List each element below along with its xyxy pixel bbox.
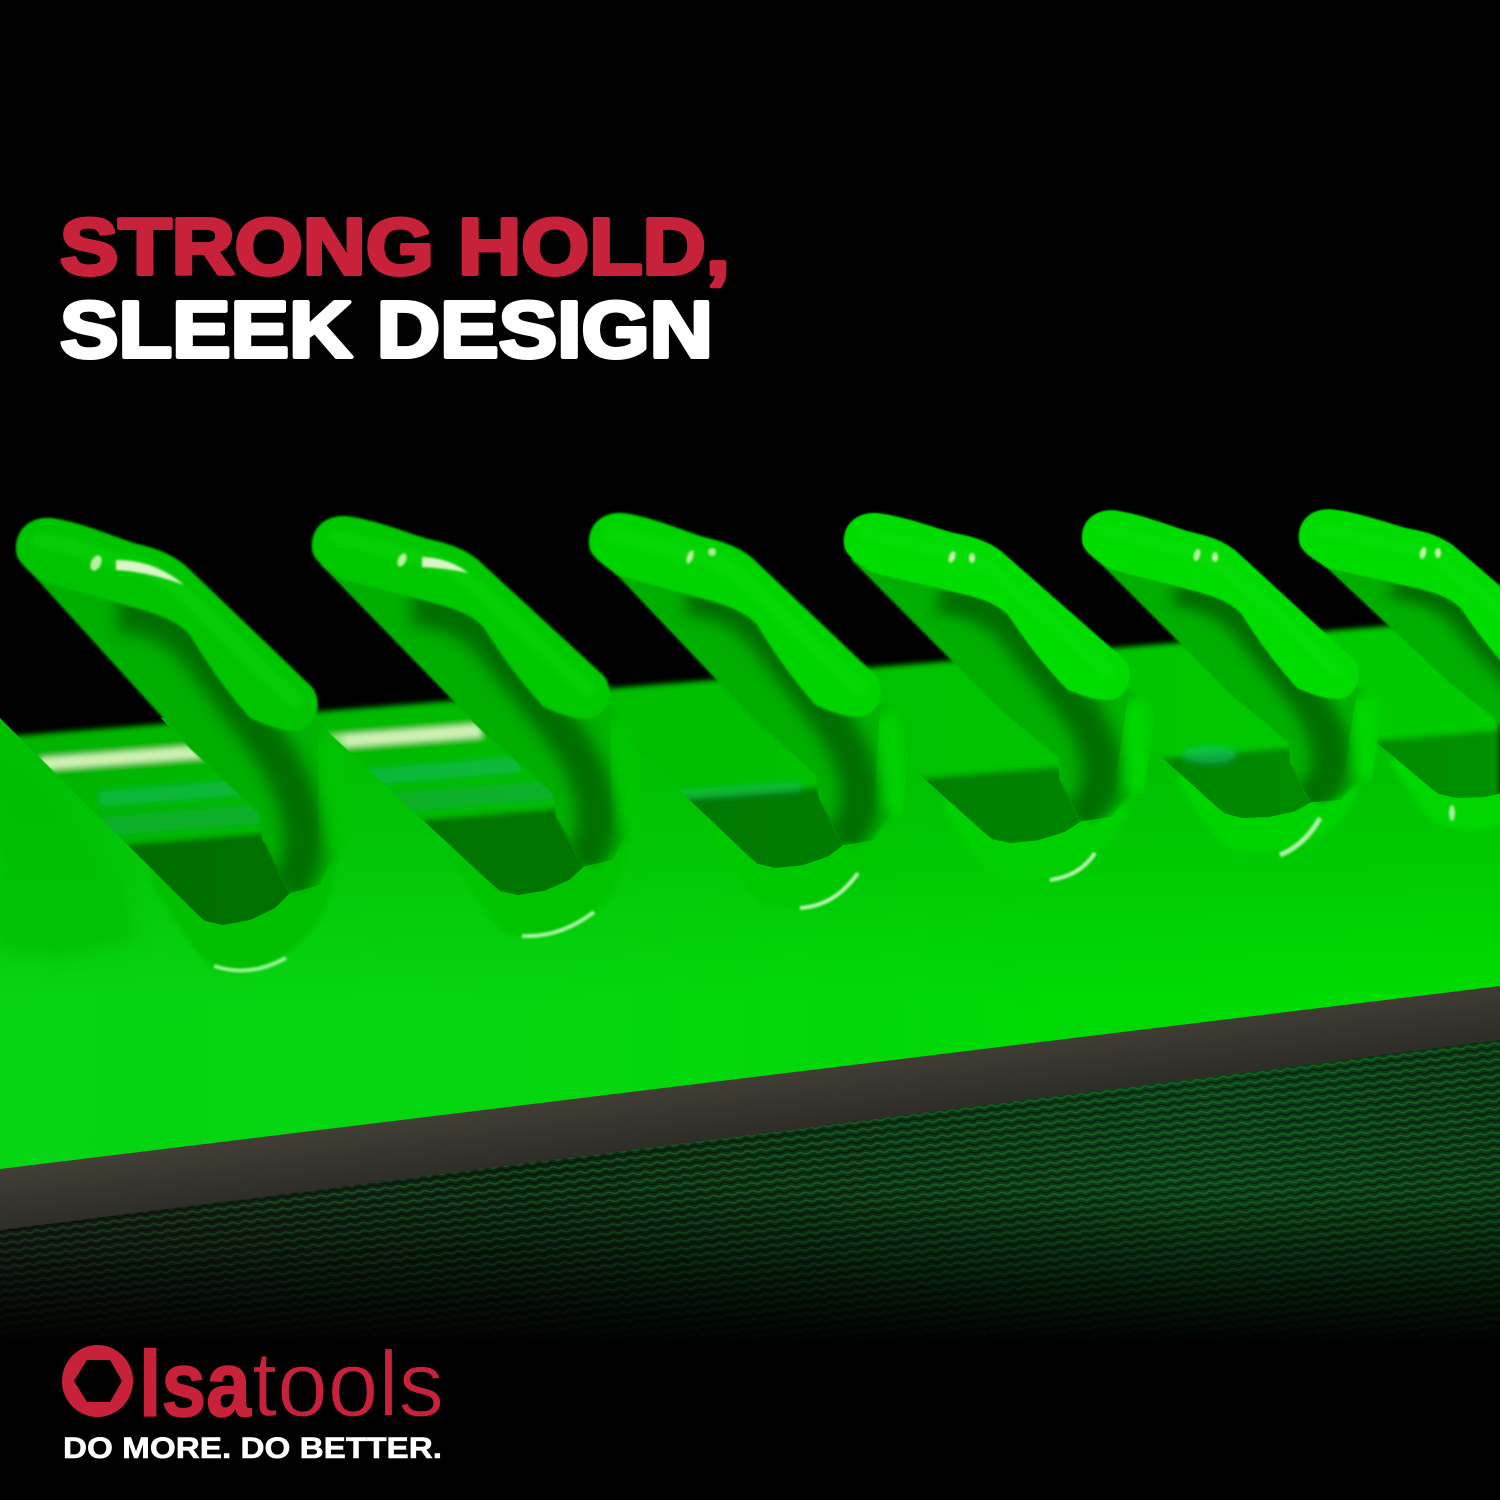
hook 3: [579, 512, 913, 852]
headline: [60, 202, 730, 374]
hook 4: [813, 502, 1171, 827]
logo O with hexagon: [62, 1345, 133, 1417]
hook 5: [1051, 505, 1399, 811]
hook 2: [311, 510, 635, 872]
hook 1: [16, 518, 342, 898]
glossy highlights on hooks and slot rings: [88, 546, 1455, 970]
headline line 2: SLEEK DESIGN: [60, 285, 713, 374]
headline line 1: STRONG HOLD,: [60, 202, 730, 291]
holder body with slots: [0, 718, 1500, 1169]
hook 6: [1260, 496, 1500, 791]
mat surface with woven texture: [0, 1030, 1500, 1360]
back rail of the holder: [0, 617, 1500, 1100]
logo wordmark light: tools: [252, 1332, 444, 1436]
logo wordmark bold: lsa: [139, 1332, 252, 1436]
tagline: DO MORE. DO BETTER.: [63, 1432, 442, 1465]
magnetic base strip: [0, 985, 1500, 1230]
brand logo: [62, 1332, 444, 1465]
